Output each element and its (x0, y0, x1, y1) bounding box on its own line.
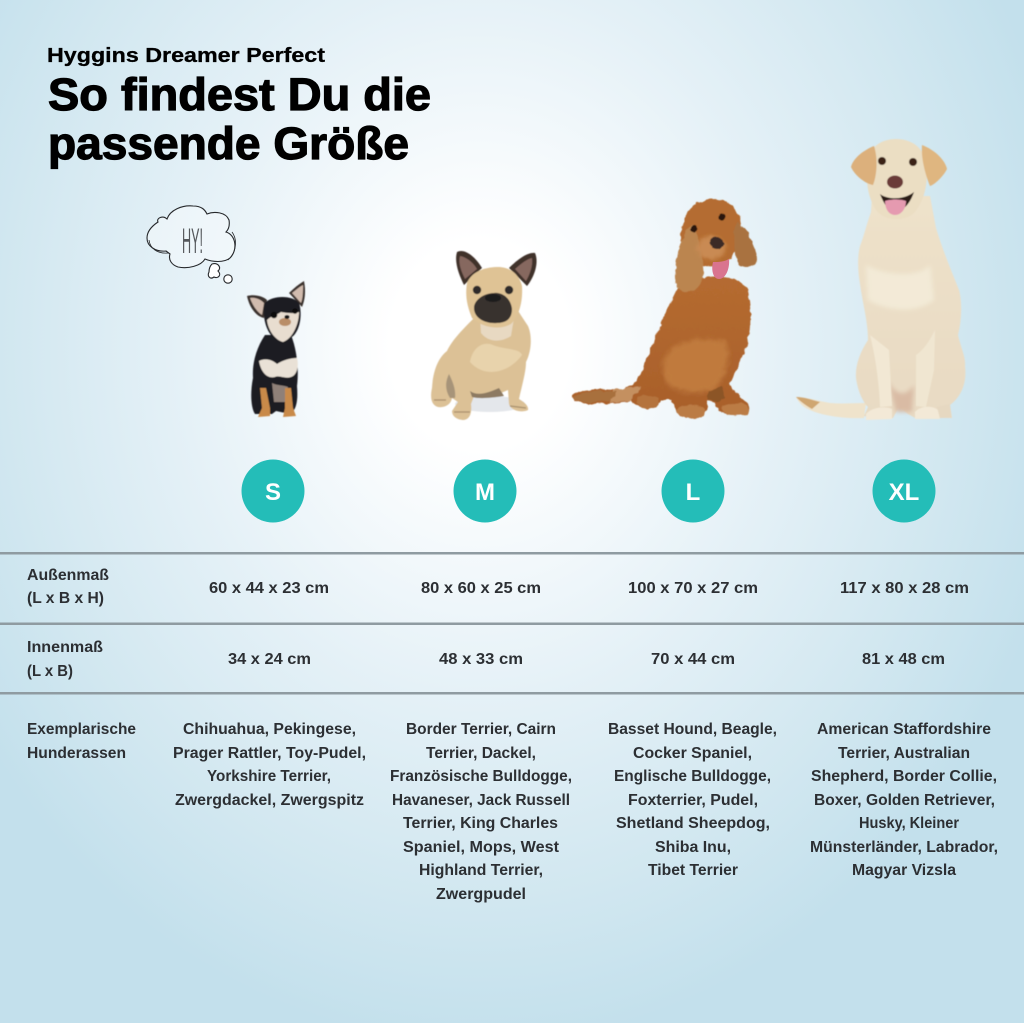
breeds size M: Französische Bulldogge, (390, 768, 572, 785)
breeds size M: Terrier, King Charles (403, 815, 558, 832)
row: outer dimensions (27, 567, 969, 607)
speech thought bubble (147, 206, 235, 283)
row: example breeds (27, 721, 998, 903)
row label: Hunderassen (27, 745, 126, 762)
row label: Innenmaß (27, 639, 104, 656)
breeds size XL: Terrier, Australian (838, 745, 970, 762)
title line 1: So findest Du die (48, 69, 431, 120)
speech thought bubble: HY! (182, 222, 203, 261)
breeds size L: Shiba Inu, (655, 839, 731, 856)
dog: cocker spaniel (572, 199, 757, 418)
badge M (454, 460, 516, 522)
badge XL (872, 460, 936, 522)
values: 60 x 44 x 23 cm (209, 580, 329, 597)
breeds size L: Basset Hound, Beagle, (608, 721, 777, 738)
subtitle: Hyggins Dreamer Perfect (47, 44, 325, 67)
badge S: S (265, 479, 281, 506)
values: 100 x 70 x 27 cm (628, 580, 758, 597)
breeds size S: Yorkshire Terrier, (207, 768, 331, 785)
row label: Exemplarische (27, 721, 136, 738)
values: 80 x 60 x 25 cm (421, 580, 541, 597)
breeds size XL (810, 721, 998, 879)
values: 34 x 24 cm (228, 651, 311, 668)
values (209, 580, 969, 597)
breeds size M: Border Terrier, Cairn (406, 721, 556, 738)
badge M: M (475, 479, 495, 506)
badge XL: XL (889, 479, 919, 506)
breeds size XL: Boxer, Golden Retriever, (814, 792, 995, 809)
heading block (47, 44, 431, 169)
breeds size M: Zwergpudel (436, 886, 526, 903)
breeds size L (608, 721, 777, 879)
values: 81 x 48 cm (862, 651, 945, 668)
breeds size L: Englische Bulldogge, (614, 768, 771, 785)
breeds size XL: American Staffordshire (817, 721, 991, 738)
breeds size L: Shetland Sheepdog, (616, 815, 770, 832)
values (228, 651, 945, 668)
breeds size L: Foxterrier, Pudel, (628, 792, 758, 809)
values: 117 x 80 x 28 cm (840, 580, 969, 597)
dog: french bulldog (431, 251, 537, 420)
breeds size M: Havaneser, Jack Russell (392, 792, 570, 809)
breeds size S: Prager Rattler, Toy-Pudel, (173, 745, 366, 762)
breeds size XL: Münsterländer, Labrador, (810, 839, 998, 856)
row label: (L x B) (27, 663, 73, 680)
dog: labrador (796, 139, 965, 420)
title line 2: passende Größe (48, 118, 409, 169)
breeds size XL: Husky, Kleiner (859, 815, 959, 832)
cocker tongue (712, 259, 729, 279)
badge L: L (686, 479, 700, 506)
breeds size L: Cocker Spaniel, (633, 745, 752, 762)
values: 70 x 44 cm (651, 651, 735, 668)
row label: (L x B x H) (27, 590, 104, 607)
badge L (662, 460, 724, 522)
breeds size S (173, 721, 366, 809)
row label: Außenmaß (27, 567, 110, 584)
row: inner dimensions (27, 639, 945, 680)
breeds size M: Spaniel, Mops, West (403, 839, 559, 856)
row label (27, 721, 136, 762)
row label (27, 639, 104, 680)
breeds size M (390, 721, 572, 903)
values: 48 x 33 cm (439, 651, 523, 668)
size badges (242, 460, 936, 522)
breeds size S: Zwergdackel, Zwergspitz (175, 792, 364, 809)
dog: chihuahua (247, 281, 305, 417)
breeds size XL: Magyar Vizsla (852, 862, 956, 879)
row label (27, 567, 110, 607)
breeds size M: Highland Terrier, (419, 862, 543, 879)
breeds size L: Tibet Terrier (648, 862, 738, 879)
breeds size M: Terrier, Dackel, (426, 745, 536, 762)
breeds size S: Chihuahua, Pekingese, (183, 721, 356, 738)
badge S (242, 460, 304, 522)
breeds size XL: Shepherd, Border Collie, (811, 768, 997, 785)
